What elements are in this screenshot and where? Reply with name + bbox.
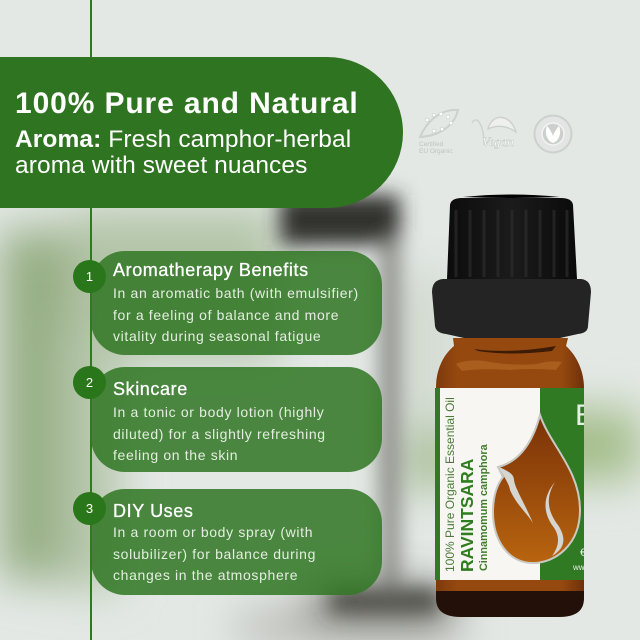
cap ribs xyxy=(456,210,567,277)
label brand xyxy=(573,404,584,570)
text 3: solubilizer) for balance during xyxy=(113,546,316,562)
icon: organic leaf xyxy=(419,110,458,155)
icon: organic leaf: Certified xyxy=(419,141,444,148)
bottle base xyxy=(436,591,584,617)
cap ribbed xyxy=(447,198,577,279)
title: 100% Pure and Natural xyxy=(15,87,359,120)
label green right xyxy=(540,388,584,580)
heading 3: DIY Uses xyxy=(113,501,194,521)
text 3: In a room or body spray (with xyxy=(113,524,313,540)
number 2 xyxy=(73,366,106,399)
neck shadow xyxy=(474,346,556,354)
drop xyxy=(493,415,580,563)
text 1: for a feeling of balance and more xyxy=(113,307,339,323)
card 3 xyxy=(91,489,382,595)
card 1 xyxy=(91,251,382,355)
text 1 xyxy=(113,285,359,344)
label line 2: RAVINTSARA xyxy=(457,458,477,572)
label line 3: Cinnamomum camphora xyxy=(478,443,490,571)
product bottle xyxy=(432,194,591,617)
vertical timeline line xyxy=(90,0,92,640)
icon: cruelty free rabbit xyxy=(534,116,572,152)
text 1: In an aromatic bath (with emulsifier) xyxy=(113,285,359,301)
aroma text xyxy=(15,126,351,178)
number 3: 3 xyxy=(86,501,93,516)
text 2: diluted) for a slightly refreshing xyxy=(113,426,326,442)
label white xyxy=(440,388,540,580)
label brand: E xyxy=(575,399,595,432)
text 3 xyxy=(113,524,316,583)
card 2 xyxy=(91,367,382,472)
label brand: € xyxy=(580,547,586,559)
icon: organic leaf: EU Organic xyxy=(419,148,453,155)
drop swirl xyxy=(546,482,563,556)
aroma text: Aroma: Fresh camphor-herbal xyxy=(15,126,351,153)
number 1 xyxy=(73,260,106,293)
text 1: vitality during seasonal fatigue xyxy=(113,328,321,344)
heading panel xyxy=(0,57,403,208)
text 2: feeling on the skin xyxy=(113,447,238,463)
aroma text: aroma with sweet nuances xyxy=(15,152,307,178)
label green left strip xyxy=(435,388,440,580)
drop swirl 2 xyxy=(499,467,533,523)
number 1: 1 xyxy=(86,269,93,284)
text 2 xyxy=(113,404,326,463)
cap collar xyxy=(432,279,591,338)
label line 1: 100% Pure Organic Essential Oil xyxy=(443,397,457,572)
heading 2: Skincare xyxy=(113,379,188,399)
number 3 xyxy=(73,492,106,525)
icon: vegan: Vegan xyxy=(482,135,514,149)
number 2: 2 xyxy=(86,375,93,390)
text 2: In a tonic or body lotion (highly xyxy=(113,404,324,420)
icon: vegan xyxy=(472,117,516,149)
certification logos xyxy=(418,109,572,155)
heading 1: Aromatherapy Benefits xyxy=(113,260,309,280)
label brand: www xyxy=(572,563,591,572)
label text xyxy=(443,397,490,572)
cap top xyxy=(463,194,560,198)
shoulder highlight xyxy=(456,360,562,371)
text 3: changes in the atmosphere xyxy=(113,567,298,583)
bottle glass xyxy=(436,338,584,617)
